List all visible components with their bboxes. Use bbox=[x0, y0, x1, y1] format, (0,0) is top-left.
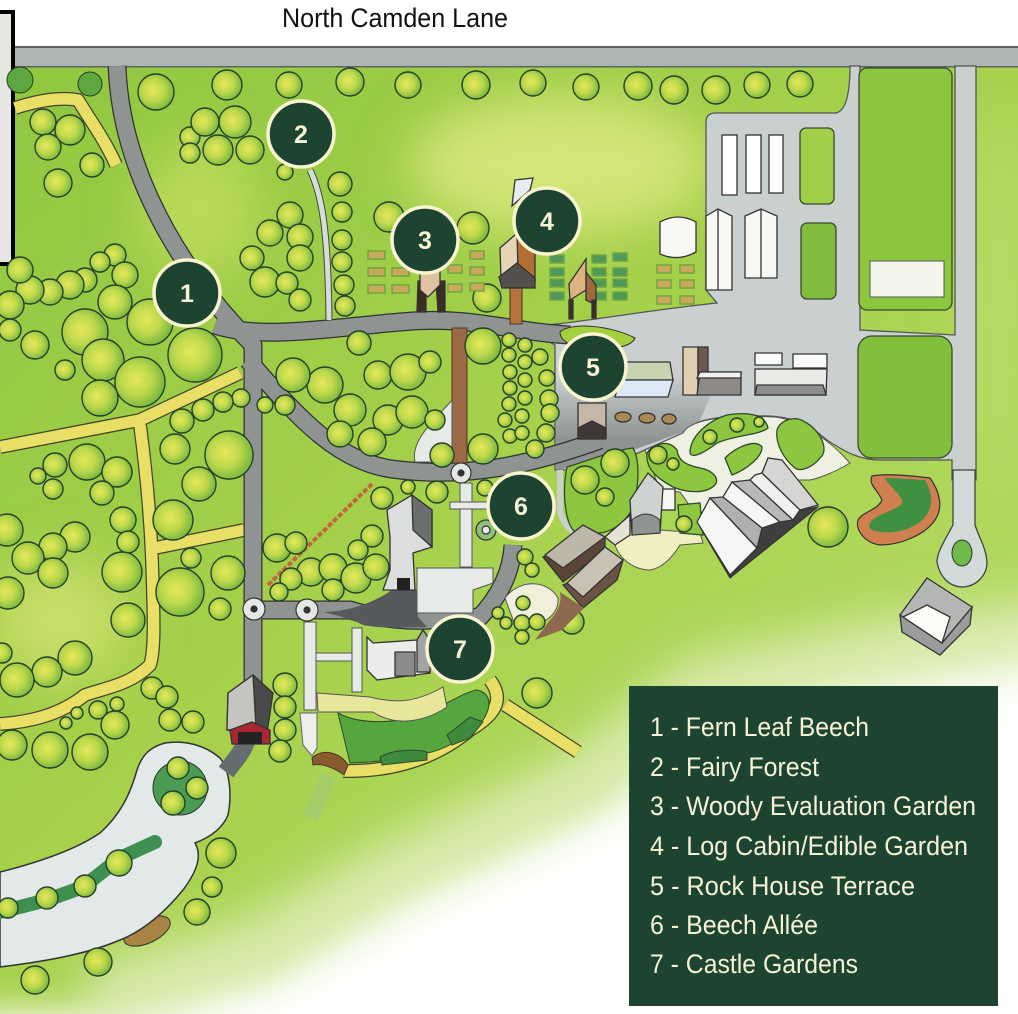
yellow path fill bbox=[0, 99, 578, 771]
red dirt trail bbox=[268, 484, 372, 585]
marker 1: 1 bbox=[180, 280, 194, 308]
boulder bed bbox=[119, 910, 175, 952]
road surface bbox=[117, 66, 600, 690]
marker 2: 2 bbox=[294, 121, 308, 149]
legend item 6: 6 - Beech Allée bbox=[650, 910, 818, 940]
vegetable plots bbox=[368, 251, 694, 304]
legend item 4: 4 - Log Cabin/Edible Garden bbox=[650, 831, 968, 861]
marker 3: 3 bbox=[418, 227, 432, 255]
legend item 7: 7 - Castle Gardens bbox=[650, 949, 858, 979]
covered bridge bbox=[227, 675, 273, 744]
outlying house bbox=[900, 578, 972, 655]
marker 4 bbox=[514, 188, 580, 254]
mansion plaza bbox=[323, 590, 427, 628]
numbered markers bbox=[154, 101, 626, 682]
legend item 2: 2 - Fairy Forest bbox=[650, 752, 819, 782]
marker 6: 6 bbox=[514, 493, 528, 521]
marker 2 bbox=[268, 101, 334, 167]
entrance drive loop bbox=[0, 735, 248, 967]
legend item 1: 1 - Fern Leaf Beech bbox=[650, 712, 869, 742]
stone stairs bbox=[300, 713, 317, 756]
marker 1 bbox=[154, 260, 220, 326]
wooden footbridge bbox=[312, 752, 348, 775]
marker 5 bbox=[560, 334, 626, 400]
marker 5: 5 bbox=[586, 354, 600, 382]
info box outline at top left bbox=[0, 12, 13, 264]
legend item 5: 5 - Rock House Terrace bbox=[650, 871, 915, 901]
marker 7: 7 bbox=[453, 636, 467, 664]
legend panel bbox=[629, 686, 998, 1006]
large barn complex bbox=[697, 458, 818, 578]
marker 6 bbox=[488, 473, 554, 539]
lawn and terrace wall bbox=[317, 687, 489, 765]
rear garden with brown bed bbox=[492, 584, 584, 644]
field plots bbox=[800, 68, 952, 458]
stream bbox=[310, 775, 328, 818]
cul-de-sac bbox=[937, 470, 987, 587]
service lot and roads bbox=[520, 66, 976, 480]
trees bbox=[0, 67, 813, 994]
brown allee path bbox=[452, 328, 467, 463]
roundabouts bbox=[243, 463, 496, 621]
marker 4: 4 bbox=[540, 208, 554, 236]
yellow footpaths outline bbox=[0, 99, 578, 771]
marker 7 bbox=[427, 616, 493, 682]
small barn bbox=[630, 473, 675, 535]
main dark roads bbox=[117, 66, 600, 690]
north road bbox=[15, 46, 1018, 68]
castle bbox=[367, 630, 430, 680]
marker 3 bbox=[392, 207, 458, 273]
white garden walks bbox=[304, 400, 850, 710]
long barns bbox=[543, 515, 630, 608]
rose garden with red gravel bbox=[857, 475, 940, 545]
garden beds with trees bbox=[560, 326, 848, 547]
east lane bbox=[560, 470, 575, 533]
stone mansion bbox=[383, 495, 432, 590]
lane to fairy forest bbox=[310, 170, 329, 320]
legend item 3: 3 - Woody Evaluation Garden bbox=[650, 791, 976, 821]
log cabin and garden sheds bbox=[417, 234, 596, 319]
white field marker bbox=[870, 261, 944, 297]
farm buildings bbox=[512, 135, 783, 290]
cabin path bbox=[510, 288, 522, 324]
rock house and service buildings bbox=[578, 347, 827, 439]
road title: North Camden Lane bbox=[282, 3, 508, 33]
